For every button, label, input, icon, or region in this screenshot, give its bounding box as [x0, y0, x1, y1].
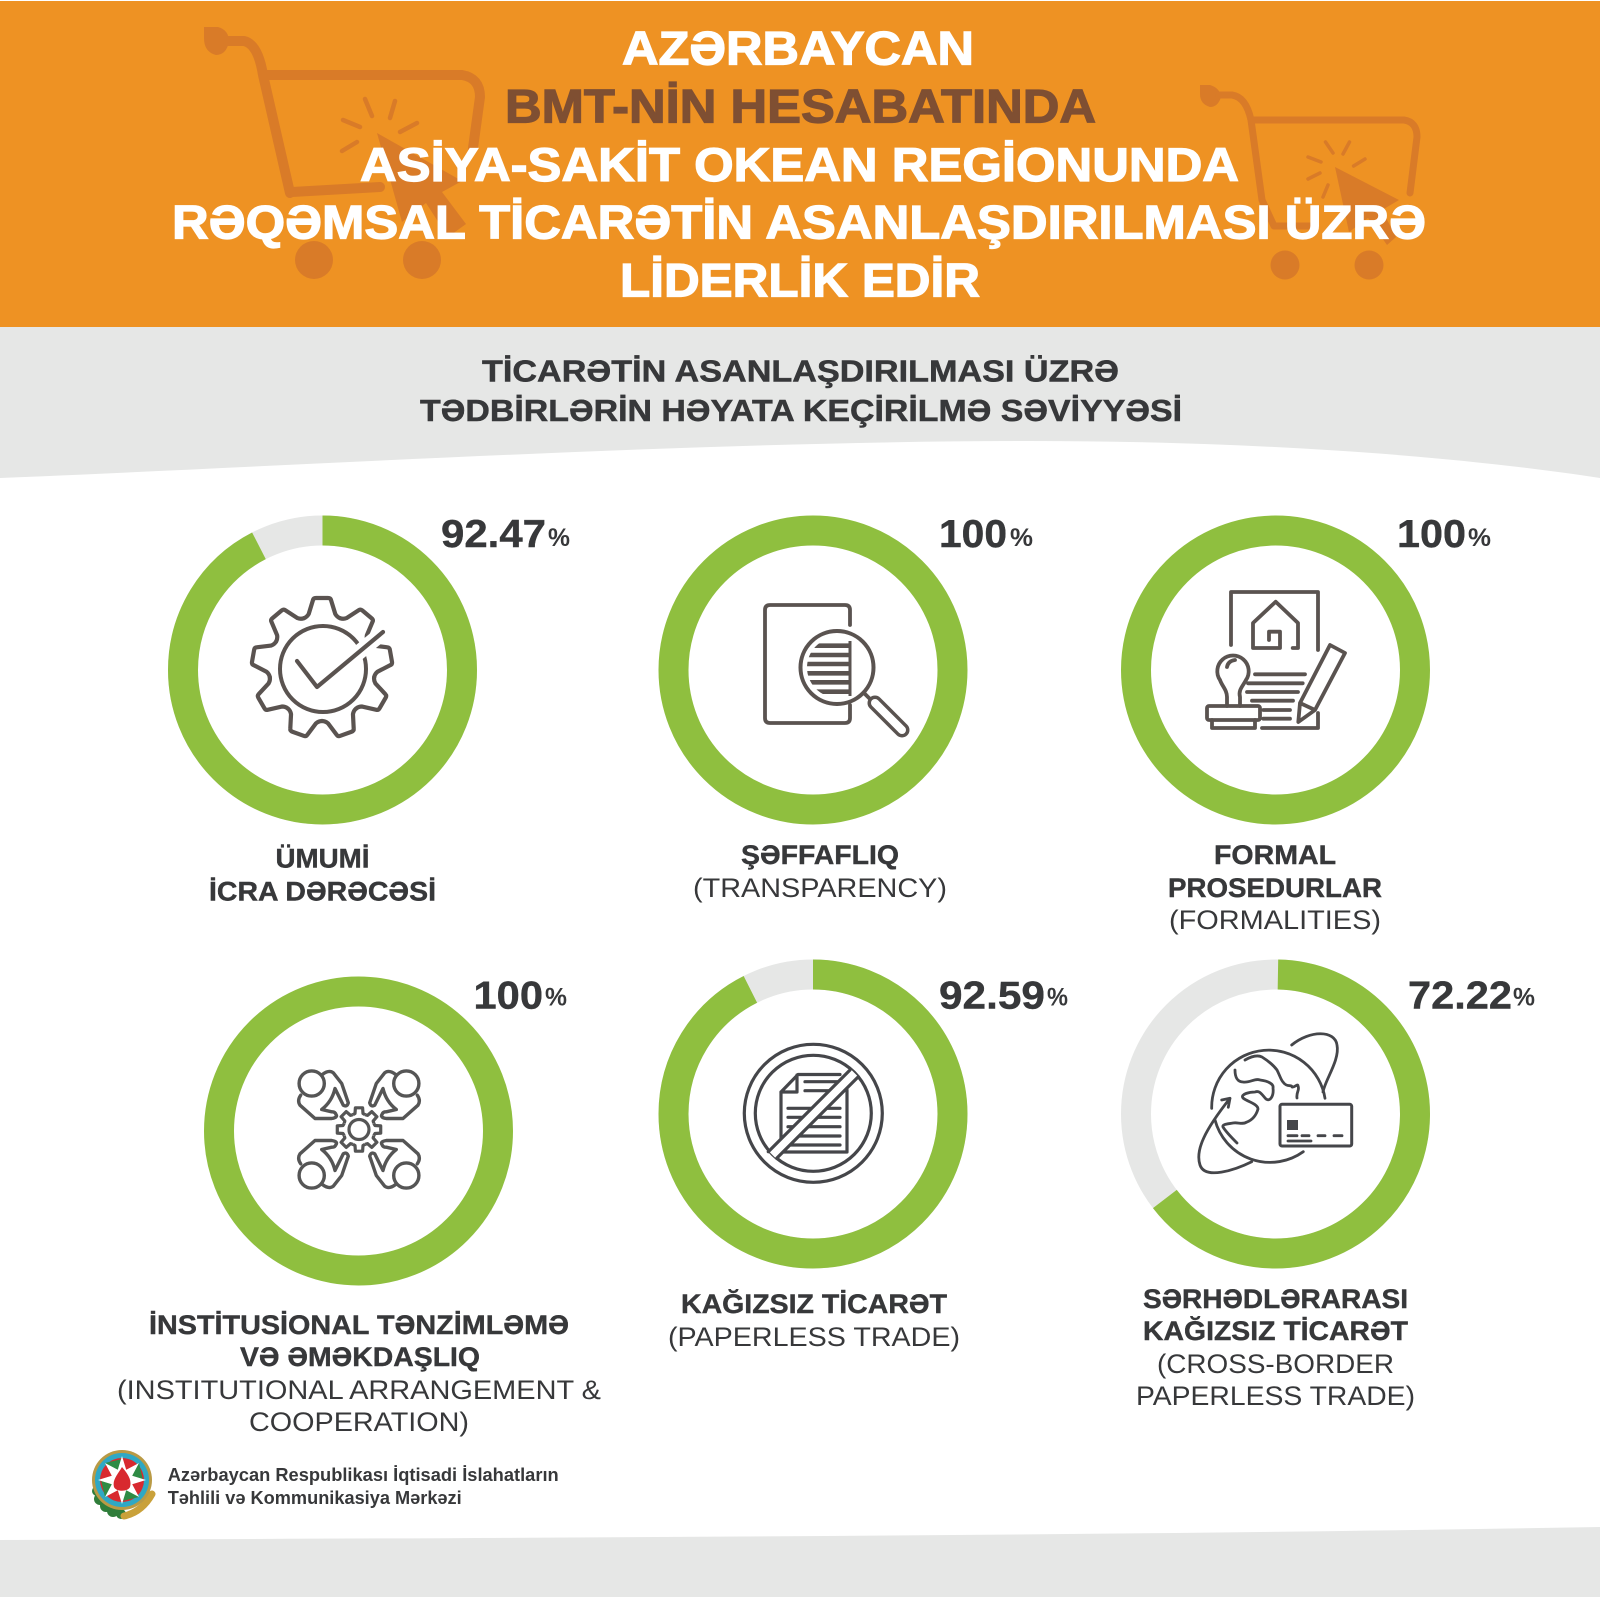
- organisation name: [168, 1464, 559, 1508]
- icon: national emblem: [92, 1450, 152, 1519]
- label: cross-border paperless trade: (CROSS-BORDER: [1157, 1349, 1394, 1379]
- icon: right shopping cart: [1200, 85, 1417, 280]
- label: paperless trade: (PAPERLESS TRADE): [668, 1322, 960, 1352]
- percentage: 72.22%: %: [1513, 984, 1535, 1012]
- panel: institutional arrangement: [117, 974, 601, 1437]
- panel: formalities: [1136, 513, 1491, 935]
- subtitle: [420, 354, 1182, 428]
- label: formalities: (FORMALITIES): [1169, 905, 1381, 935]
- panel: overall implementation: [183, 513, 570, 906]
- label: institutional arrangement: İNSTİTUSİONAL TƏNZİMLƏMƏ: [149, 1310, 569, 1340]
- icon: gear with check mark: [250, 598, 394, 740]
- panel: cross-border paperless trade: [1134, 972, 1535, 1411]
- icon: document, stamp and pencil: [1207, 592, 1345, 728]
- label: transparency: ŞƏFFAFLIQ: [741, 840, 899, 870]
- percentage: 100%: [474, 974, 567, 1018]
- percentage: 100%: [1397, 513, 1491, 556]
- percentage: 100%: %: [545, 984, 567, 1012]
- percentage: 92.59%: %: [1047, 984, 1068, 1012]
- panel: bottom grey band: [0, 1527, 1600, 1597]
- icon: document with magnifier: [765, 605, 902, 730]
- panel: orange header: [0, 1, 1600, 327]
- donut chart: 92.59%: [674, 974, 952, 1254]
- footer: organisation logo and name: [92, 1450, 559, 1519]
- percentage: 100%: 100: [939, 513, 1007, 556]
- label: formalities: PROSEDURLAR: [1168, 873, 1382, 903]
- percentage: 92.59%: 92.59: [939, 974, 1045, 1018]
- donut chart: 100%: [219, 992, 498, 1270]
- title: LİDERLİK EDİR: [620, 254, 980, 307]
- title: AZƏRBAYCAN: [622, 22, 974, 74]
- donut chart: 72.22%: [1134, 972, 1417, 1256]
- percentage: 100%: [939, 513, 1033, 556]
- label: institutional arrangement: [117, 1310, 601, 1437]
- donut chart: 100%: [1136, 530, 1415, 810]
- organisation name: Azərbaycan Respublikası İqtisadi İslahatların: [168, 1464, 559, 1485]
- percentage: 100%: 100: [474, 974, 543, 1018]
- organisation name: Təhlili və Kommunikasiya Mərkəzi: [168, 1487, 462, 1508]
- percentage: 92.47%: %: [548, 524, 570, 552]
- title: BMT-NİN HESABATINDA: [505, 80, 1096, 133]
- icon: four people around a gear: [299, 1071, 419, 1188]
- title: [172, 22, 1426, 307]
- percentage: 100%: %: [1010, 524, 1033, 552]
- label: formalities: FORMAL: [1214, 840, 1336, 870]
- subtitle: TİCARƏTİN ASANLAŞDIRILMASI ÜZRƏ: [482, 354, 1119, 388]
- label: overall implementation: [209, 844, 436, 906]
- percentage: 92.47%: 92.47: [441, 513, 546, 556]
- label: cross-border paperless trade: KAĞIZSIZ TİCARƏT: [1143, 1315, 1409, 1346]
- label: overall implementation: İCRA DƏRƏCƏSİ: [209, 876, 436, 906]
- title: ASİYA-SAKİT OKEAN REGİONUNDA: [360, 138, 1239, 191]
- donut chart: 92.47%: [183, 530, 462, 810]
- label: overall implementation: ÜMUMİ: [276, 844, 370, 874]
- label: transparency: (TRANSPARENCY): [693, 873, 947, 903]
- label: institutional arrangement: (INSTITUTIONAL ARRANGEMENT &: [117, 1375, 601, 1405]
- label: paperless trade: KAĞIZSIZ TİCARƏT: [681, 1288, 948, 1319]
- label: institutional arrangement: COOPERATION): [249, 1407, 469, 1437]
- label: formalities: [1168, 840, 1382, 935]
- label: cross-border paperless trade: PAPERLESS TRADE): [1136, 1381, 1415, 1411]
- icon: globe with payment card: [1199, 1034, 1352, 1173]
- icon: left shopping cart: [204, 27, 480, 279]
- label: paperless trade: [668, 1288, 960, 1352]
- label: cross-border paperless trade: [1136, 1284, 1415, 1411]
- percentage: 72.22%: 72.22: [1408, 974, 1512, 1018]
- panel: grey subtitle band: [0, 327, 1600, 478]
- label: institutional arrangement: VƏ ƏMƏKDAŞLIQ: [240, 1342, 480, 1372]
- donut chart: 100%: [674, 530, 952, 810]
- label: transparency: [693, 840, 947, 903]
- icon: crossed-out document: [744, 1044, 882, 1182]
- title: RƏQƏMSAL TİCARƏTİN ASANLAŞDIRILMASI ÜZRƏ: [172, 196, 1426, 249]
- panel: transparency: [674, 513, 1033, 903]
- panel: paperless trade: [668, 974, 1068, 1352]
- label: cross-border paperless trade: SƏRHƏDLƏRARASI: [1143, 1284, 1408, 1314]
- percentage: 100%: 100: [1397, 513, 1466, 556]
- subtitle: TƏDBİRLƏRİN HƏYATA KEÇİRİLMƏ SƏVİYYƏSİ: [420, 393, 1182, 428]
- percentage: 100%: %: [1468, 524, 1491, 552]
